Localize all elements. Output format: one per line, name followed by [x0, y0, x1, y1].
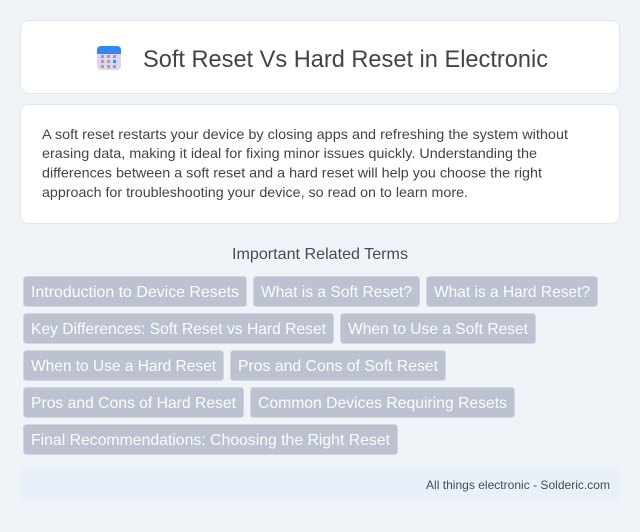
tag: pros and cons of soft reset: Pros and Cons of Soft Reset	[238, 358, 439, 375]
tag: pros and cons of soft reset	[230, 350, 446, 380]
tag: what is a hard reset: What is a Hard Reset?	[434, 284, 590, 301]
tag: final recommendations: Final Recommendations: Choosing the Right Reset	[31, 432, 391, 449]
tag: pros and cons of hard reset: Pros and Cons of Hard Reset	[31, 395, 237, 412]
tag: key differences: Key Differences: Soft Reset vs Hard Reset	[31, 321, 327, 338]
tag: final recommendations	[24, 424, 398, 454]
tag: pros and cons of hard reset	[24, 388, 244, 418]
tag: when to use a soft reset	[340, 314, 536, 344]
tag: when to use a hard reset: When to Use a Hard Reset	[31, 358, 217, 375]
panel: title header	[20, 20, 620, 94]
tag: when to use a soft reset: When to Use a Soft Reset	[348, 321, 529, 338]
heading: important related terms: Important Related Terms	[232, 246, 408, 263]
text block: introduction paragraph: erasing data, making it ideal for fixing minor issues quickly. Understanding the	[42, 145, 537, 161]
tag: common devices requiring resets	[250, 388, 514, 418]
text block: introduction paragraph: differences between a soft reset and a hard reset will help you choose the right	[42, 164, 542, 180]
title: Soft Reset Vs Hard Reset in Electronic	[143, 46, 548, 73]
tag: key differences	[24, 314, 334, 344]
tag: what is a soft reset: What is a Soft Reset?	[261, 284, 412, 301]
tag: what is a hard reset	[426, 276, 598, 306]
tag: when to use a hard reset	[24, 350, 224, 380]
text block: introduction paragraph: approach for troubleshooting your device, so read on to learn more.	[42, 184, 468, 200]
tag: common devices requiring resets: Common Devices Requiring Resets	[258, 395, 507, 412]
text block: introduction paragraph: A soft reset restarts your device by closing apps and refreshing the system without	[42, 126, 568, 142]
footer credit: All things electronic - Solderic.com	[426, 478, 610, 492]
tag: introduction to device resets	[24, 276, 246, 306]
tag: what is a soft reset	[254, 276, 420, 306]
panel: introduction	[20, 104, 620, 224]
footer bar	[20, 468, 620, 502]
tag: introduction to device resets: Introduction to Device Resets	[31, 284, 239, 301]
icon: calendar grid	[97, 46, 121, 70]
panel: related term tags	[24, 276, 598, 454]
text block: introduction paragraph	[42, 126, 568, 200]
